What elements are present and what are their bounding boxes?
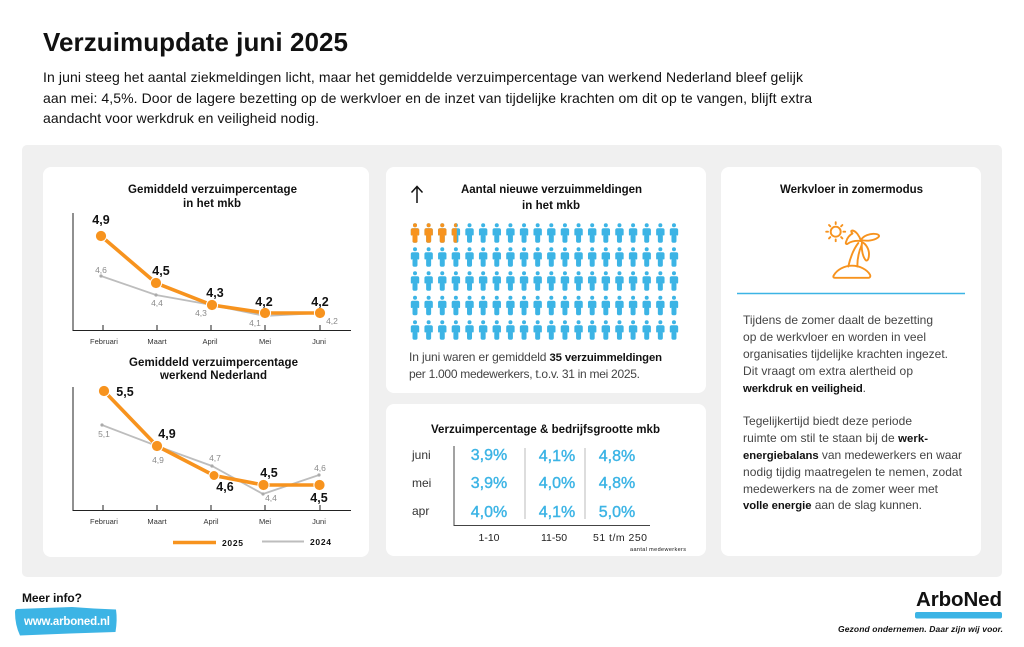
table values: 4,1% bbox=[539, 448, 575, 465]
legend: 2025 bbox=[222, 538, 243, 548]
chart title: werkend Nederland bbox=[129, 357, 298, 382]
row labels: apr bbox=[412, 504, 429, 518]
panel: verzuimpercentage charts bbox=[43, 167, 369, 557]
logo: ArboNed: ArboNed bbox=[916, 588, 1002, 611]
panel: verzuimpercentage en bedrijfsgrootte bbox=[386, 404, 706, 556]
line chart: werkend Nederland: 4,9 bbox=[158, 427, 176, 441]
pictogram: 100 people bbox=[411, 223, 678, 340]
panel: werkvloer in zomermodus bbox=[721, 167, 981, 556]
line chart: mkb: Juni bbox=[312, 337, 326, 346]
line chart: werkend Nederland: 4,6 bbox=[216, 480, 234, 494]
line chart: mkb: 4,2 bbox=[326, 316, 338, 326]
line chart: mkb: 4,9 bbox=[92, 213, 110, 227]
chart title: mkb bbox=[128, 184, 297, 210]
line chart: werkend Nederland: 5,1 bbox=[98, 429, 110, 439]
text: verzuimmeldingen bbox=[409, 350, 662, 381]
body text: op de werkvloer en worden in veel bbox=[743, 330, 926, 344]
table values: 5,0% bbox=[599, 504, 635, 521]
line chart: werkend Nederland: Mei bbox=[259, 517, 271, 526]
line chart: mkb: 4,3 bbox=[195, 308, 207, 318]
column labels: aantal medewerkers bbox=[630, 547, 686, 553]
row labels: mei bbox=[412, 476, 431, 490]
legend: 2024 bbox=[310, 537, 331, 547]
chart title: werkend Nederland: werkend Nederland bbox=[159, 370, 267, 382]
panel: nieuwe verzuimmeldingen bbox=[386, 167, 706, 393]
line chart: mkb: 4,6 bbox=[95, 265, 107, 275]
intro text bbox=[43, 69, 812, 126]
chart title: mkb: in het mkb bbox=[183, 198, 241, 210]
column labels bbox=[478, 532, 686, 553]
line chart: mkb: 4,5 bbox=[152, 264, 170, 278]
icon: palm island and sun bbox=[826, 222, 879, 278]
body text: medewerkers na de zomer weer met bbox=[743, 482, 939, 496]
line chart: werkend Nederland: Februari bbox=[90, 517, 118, 526]
line chart: mkb: Februari bbox=[90, 337, 118, 346]
website button bbox=[15, 607, 117, 636]
body text: Tijdens de zomer daalt de bezetting bbox=[743, 313, 933, 327]
chart title: werkend Nederland: Gemiddeld verzuimpercentage bbox=[129, 357, 298, 369]
title: Verzuimupdate juni 2025 bbox=[43, 27, 348, 57]
line chart: werkend Nederland: April bbox=[203, 517, 219, 526]
column labels: 1-10 bbox=[478, 532, 500, 544]
panel title: in het mkb bbox=[522, 200, 580, 212]
legend bbox=[173, 537, 331, 548]
line chart: werkend Nederland: 4,4 bbox=[265, 493, 277, 503]
line chart: werkend Nederland: Juni bbox=[312, 517, 326, 526]
body text: nodig tijdig maatregelen te nemen, zodat bbox=[743, 465, 963, 479]
table values: 3,9% bbox=[471, 475, 507, 492]
column labels: 11-50 bbox=[541, 532, 567, 544]
line chart: werkend Nederland bbox=[73, 385, 351, 526]
table values: 4,8% bbox=[599, 475, 635, 492]
table values: 4,8% bbox=[599, 448, 635, 465]
body text: organisaties tijdelijke krachten ingezet. bbox=[743, 347, 948, 361]
line chart: werkend Nederland: 5,5 bbox=[116, 385, 134, 399]
line chart: mkb: Maart bbox=[147, 337, 168, 346]
table values: 4,0% bbox=[471, 504, 507, 521]
column labels: 51 t/m 250 bbox=[593, 532, 647, 544]
line chart: werkend Nederland: 4,5 bbox=[260, 466, 278, 480]
text: verzuimmeldingen: per 1.000 medewerkers, t.o.v. 31 in mei 2025. bbox=[409, 367, 640, 381]
table values bbox=[471, 447, 635, 521]
body text: werkdruk en veiligheid. bbox=[742, 381, 866, 395]
text: verzuimmeldingen: In juni waren er gemiddeld 35 verzuimmeldingen bbox=[409, 350, 662, 364]
body text: Tegelijkertijd biedt deze periode bbox=[743, 414, 912, 428]
line chart: werkend Nederland: 4,6 bbox=[314, 463, 326, 473]
line chart: mkb: 4,3 bbox=[206, 286, 224, 300]
divider line bbox=[737, 292, 965, 294]
body text: volle energie aan de slag kunnen. bbox=[743, 498, 922, 512]
panel title: Werkvloer in zomermodus bbox=[780, 184, 923, 196]
line chart: mkb bbox=[73, 213, 351, 346]
table grid bbox=[454, 446, 650, 526]
line chart: werkend Nederland: 4,9 bbox=[152, 455, 164, 465]
line chart: mkb: 4,4 bbox=[151, 298, 163, 308]
intro text: aandacht voor werkdruk en veiligheid nodig. bbox=[43, 110, 319, 126]
website button: www.arboned.nl bbox=[23, 616, 110, 628]
line chart: mkb: 4,1 bbox=[249, 318, 261, 328]
line chart: mkb: 4,2 bbox=[255, 295, 273, 309]
line chart: mkb: 4,2 bbox=[311, 295, 329, 309]
intro text: aan mei: 4,5%. Door de lagere bezetting op de werkvloer en de inzet van tijdelijke krachten om dit op te vangen, blijft extra bbox=[43, 90, 812, 106]
intro text: In juni steeg het aantal ziekmeldingen licht, maar het gemiddelde verzuimpercentage van werkend Nederland bleef gelijk bbox=[43, 69, 804, 85]
panel title: Aantal nieuwe verzuimmeldingen bbox=[461, 184, 642, 196]
grey background panel bbox=[22, 145, 1002, 577]
body text: ruimte om stil te staan bij de werk- bbox=[743, 431, 928, 445]
body text: Dit vraagt om extra alertheid op bbox=[743, 364, 913, 378]
line chart: mkb: Mei bbox=[259, 337, 271, 346]
body text: energiebalans van medewerkers en waar bbox=[743, 448, 962, 462]
row labels: juni bbox=[411, 448, 431, 462]
line chart: mkb: April bbox=[202, 337, 218, 346]
line chart: werkend Nederland: Maart bbox=[147, 517, 168, 526]
row labels bbox=[411, 448, 431, 518]
logo: ArboNed: Gezond ondernemen. Daar zijn wij voor. bbox=[838, 624, 1003, 634]
table values: 4,0% bbox=[539, 475, 575, 492]
table title: Verzuimpercentage & bedrijfsgrootte mkb bbox=[431, 424, 660, 436]
body text bbox=[742, 313, 963, 512]
meer info: Meer info? bbox=[22, 591, 82, 605]
panel title bbox=[461, 184, 642, 212]
table values: 4,1% bbox=[539, 504, 575, 521]
icon: arrow up bbox=[412, 186, 422, 203]
logo: ArboNed bbox=[838, 588, 1003, 634]
line chart: werkend Nederland: 4,7 bbox=[209, 453, 221, 463]
table values: 3,9% bbox=[471, 447, 507, 464]
chart title: mkb: Gemiddeld verzuimpercentage bbox=[128, 184, 297, 196]
line chart: werkend Nederland: 4,5 bbox=[310, 491, 328, 505]
